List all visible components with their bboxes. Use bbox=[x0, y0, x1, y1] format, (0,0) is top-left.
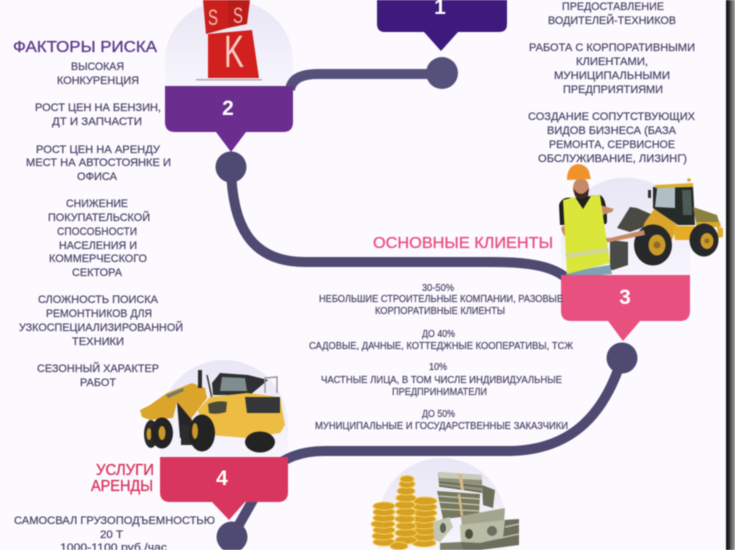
node 3 bbox=[606, 342, 638, 374]
rental price text: САМОСВАЛ ГРУЗОПОДЪЕМНОСТЬЮ bbox=[14, 515, 215, 527]
risk factors list: ТЕХНИКИ bbox=[72, 336, 124, 348]
step 4 badge bbox=[160, 457, 288, 520]
page frame right edge bbox=[726, 0, 735, 550]
opportunities list: ВОДИТЕЛЕЙ-ТЕХНИКОВ bbox=[548, 14, 676, 27]
rental price text: 20 Т bbox=[100, 529, 123, 541]
risk factors list: УЗКОСПЕЦИАЛИЗИРОВАННОЙ bbox=[19, 321, 183, 334]
risk factors list: КОНКУРЕНЦИЯ bbox=[57, 75, 139, 87]
client segments list: КОРПОРАТИВНЫЕ КЛИЕНТЫ bbox=[375, 306, 505, 317]
node 1 bbox=[426, 57, 458, 89]
risk factors list: ВЫСОКАЯ bbox=[71, 61, 124, 73]
risk factors list: СЛОЖНОСТЬ ПОИСКА bbox=[38, 294, 159, 306]
icon: risk blocks: S bbox=[233, 3, 243, 28]
heading: rental services: УСЛУГИ bbox=[96, 462, 154, 479]
risk factors list: СПОСОБНОСТИ bbox=[57, 226, 137, 238]
opportunities list: РЕМОНТА, СЕРВИСНОЕ bbox=[549, 139, 675, 151]
risk factors list: ОФИСА bbox=[77, 171, 118, 183]
risk factors list: ДТ И ЗАПЧАСТИ bbox=[52, 116, 142, 128]
client segments list: ДО 40% bbox=[422, 329, 455, 340]
opportunities list: РАБОТА С КОРПОРАТИВНЫМИ bbox=[529, 42, 695, 54]
risk factors list: РОСТ ЦЕН НА АРЕНДУ bbox=[36, 144, 161, 156]
client segments list: САДОВЫЕ, ДАЧНЫЕ, КОТТЕДЖНЫЕ КООПЕРАТИВЫ, ТСЖ bbox=[309, 341, 574, 352]
risk factors list: СЕКТОРА bbox=[72, 267, 123, 279]
risk factors list: КОММЕРЧЕСКОГО bbox=[49, 253, 147, 265]
client segments list bbox=[309, 283, 574, 432]
connector path between steps 2 and 3 bbox=[231, 167, 565, 277]
opportunities list bbox=[528, 1, 696, 165]
icon: risk blocks: K bbox=[224, 26, 244, 77]
illustration: worker in vest bbox=[559, 164, 645, 278]
client segments list: ЧАСТНЫЕ ЛИЦА, В ТОМ ЧИСЛЕ ИНДИВИДУАЛЬНЫЕ bbox=[321, 375, 562, 386]
heading: rental services bbox=[91, 462, 154, 495]
opportunities list: ОБСЛУЖИВАНИЕ, ЛИЗИНГ) bbox=[538, 153, 687, 165]
step 1 badge bbox=[377, 0, 507, 51]
illustration: gold coins bbox=[371, 476, 437, 550]
connector path between steps 3 and 4 bbox=[232, 358, 622, 537]
risk factors list: НАСЕЛЕНИЯ И bbox=[59, 240, 137, 252]
step 2 badge bbox=[165, 86, 293, 152]
client segments list: НЕБОЛЬШИЕ СТРОИТЕЛЬНЫЕ КОМПАНИИ, РАЗОВЫЕ bbox=[319, 294, 563, 305]
heading: main clients: ОСНОВНЫЕ КЛИЕНТЫ bbox=[373, 235, 553, 252]
step 3 badge bbox=[561, 275, 690, 341]
client segments list: ДО 50% bbox=[422, 409, 455, 420]
client segments list: ПРЕДПРИНИМАТЕЛИ bbox=[392, 387, 487, 398]
opportunities list: ПРЕДПРИЯТИЯМИ bbox=[563, 84, 663, 96]
step 2 badge: 2 bbox=[222, 97, 234, 120]
risk factors list: МЕСТ НА АВТОСТОЯНКЕ И bbox=[26, 157, 171, 169]
heading: risk factors: ФАКТОРЫ РИСКА bbox=[13, 39, 157, 56]
connector path between steps 1 and 2 bbox=[290, 74, 442, 90]
illustration: loader bbox=[610, 178, 723, 270]
heading: rental services: АРЕНДЫ bbox=[91, 478, 153, 495]
node 2 bbox=[216, 152, 246, 182]
risk factors list bbox=[19, 61, 183, 389]
node 4 bbox=[216, 522, 248, 550]
icon: risk blocks bbox=[196, 0, 262, 80]
risk factors list: РЕМОНТНИКОВ ДЛЯ bbox=[46, 308, 152, 320]
client segments list: 30-50% bbox=[422, 283, 454, 294]
opportunities list: СОЗДАНИЕ СОПУТСТВУЮЩИХ bbox=[528, 111, 696, 123]
step 4 badge: 4 bbox=[216, 467, 228, 490]
illustration: bundles of money bbox=[433, 472, 519, 550]
illustration: dump truck bbox=[140, 370, 285, 452]
icon: risk blocks: S bbox=[208, 5, 218, 30]
client segments list: 10% bbox=[429, 362, 447, 373]
opportunities list: МУНИЦИПАЛЬНЫМИ bbox=[554, 70, 670, 82]
risk factors list: СЕЗОННЫЙ ХАРАКТЕР bbox=[37, 362, 159, 375]
risk factors list: СНИЖЕНИЕ bbox=[66, 198, 128, 210]
step 3 badge: 3 bbox=[619, 286, 631, 309]
opportunities list: ПРЕДОСТАВЛЕНИЕ bbox=[562, 1, 664, 13]
client segments list: МУНИЦИПАЛЬНЫЕ И ГОСУДАРСТВЕННЫЕ ЗАКАЗЧИКИ bbox=[315, 421, 568, 432]
risk factors list: РАБОТ bbox=[80, 377, 116, 389]
risk factors list: РОСТ ЦЕН НА БЕНЗИН, bbox=[35, 102, 161, 114]
panel backdrop domes bbox=[160, 0, 690, 550]
risk factors list: ПОКУПАТЕЛЬСКОЙ bbox=[48, 211, 150, 224]
opportunities list: КЛИЕНТАМИ, bbox=[576, 56, 648, 68]
rental price text bbox=[14, 515, 215, 550]
opportunities list: ВИДОВ БИЗНЕСА (БАЗА bbox=[547, 125, 677, 137]
